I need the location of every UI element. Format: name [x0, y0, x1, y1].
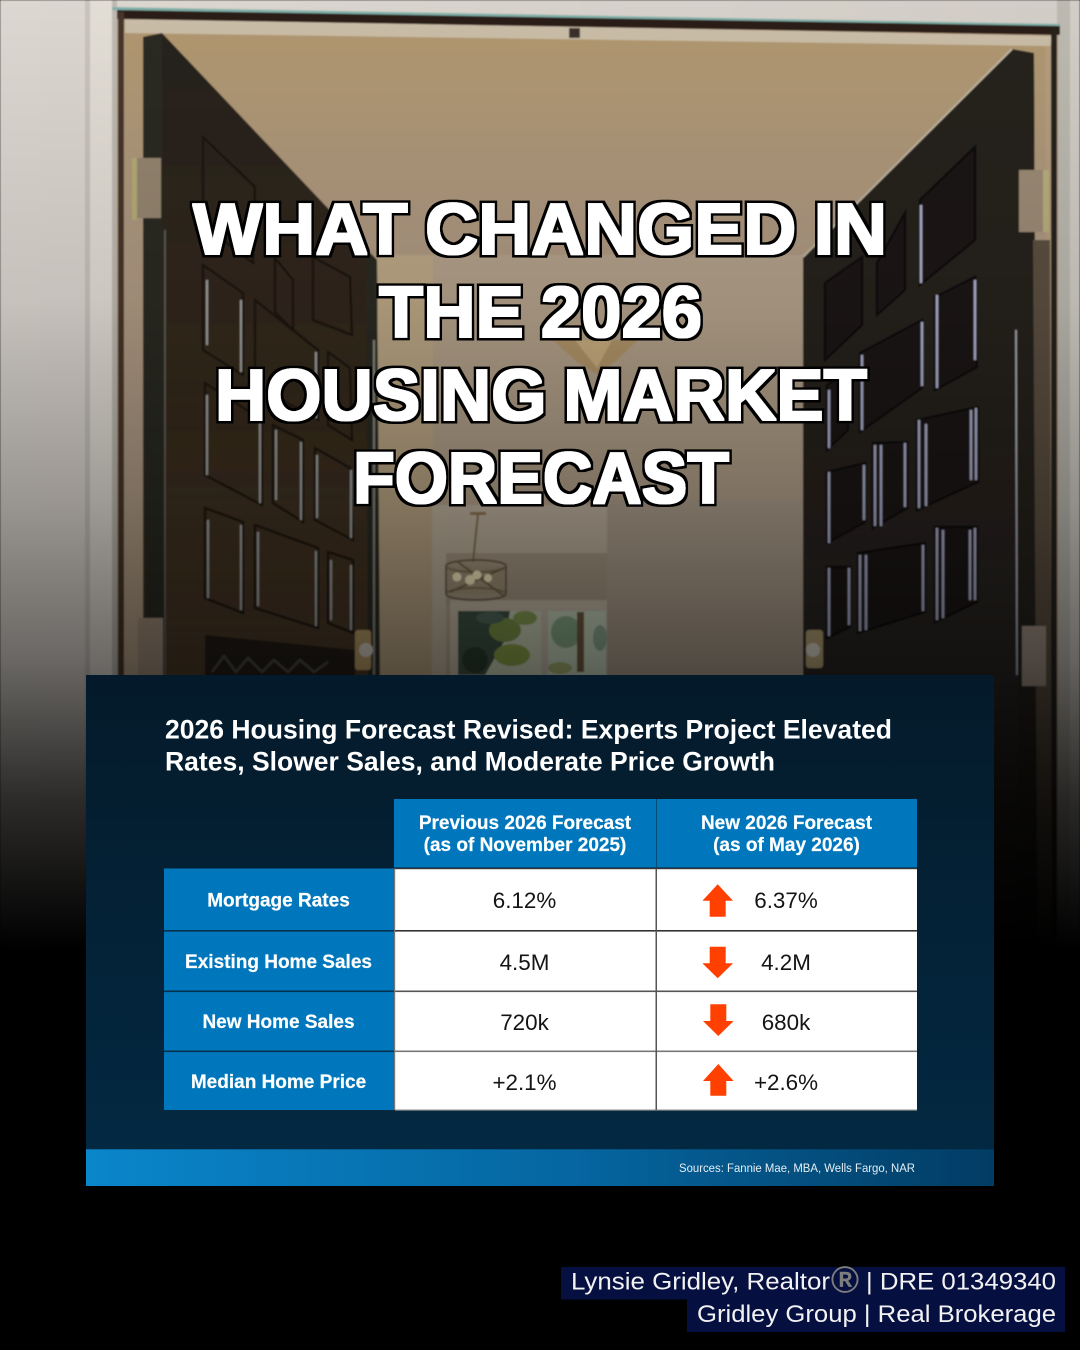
previous forecast values: 4.5M — [500, 950, 549, 975]
table values grid — [394, 868, 917, 1111]
agent contact block: | DRE 01349340 — [866, 1268, 1056, 1296]
new forecast values: 680k — [762, 1010, 811, 1035]
icon: up arrow mortgage rates — [702, 884, 733, 917]
table row labels: Median Home Price — [191, 1072, 366, 1093]
ceiling pendant light — [553, 340, 638, 374]
table row labels — [164, 868, 394, 1110]
new forecast values: 4.2M — [761, 950, 811, 975]
hallway window with foliage — [450, 603, 607, 675]
new forecast values: +2.6% — [754, 1070, 818, 1095]
table row labels: Mortgage Rates — [207, 890, 350, 912]
sources bar — [86, 1149, 994, 1186]
table header: previous forecast: Previous 2026 Forecast — [419, 813, 632, 834]
panel: forecast table slide — [86, 675, 994, 1186]
table header: new forecast — [656, 799, 917, 868]
table header: previous forecast — [394, 799, 656, 868]
table header: new forecast: (as of May 2026) — [713, 835, 860, 856]
new forecast values — [754, 888, 818, 1095]
previous forecast values — [492, 888, 557, 1095]
previous forecast values: 6.12% — [493, 888, 556, 913]
title: WHAT CHANGED IN — [193, 190, 887, 270]
title: HOUSING MARKET — [215, 356, 867, 436]
corridor walls and hall — [377, 255, 805, 685]
table header: new forecast: New 2026 Forecast — [701, 813, 873, 834]
previous forecast values: 720k — [500, 1010, 550, 1035]
left door — [143, 33, 380, 1000]
panel heading: 2026 Housing Forecast Revised: Experts Project Elevated — [165, 714, 892, 744]
table row labels: New Home Sales — [202, 1012, 355, 1033]
icon: up arrow median home price — [703, 1064, 734, 1096]
agent contact block — [561, 1265, 1065, 1332]
agent contact block: Ⓡ — [831, 1265, 859, 1297]
right door — [803, 49, 1052, 1000]
new forecast values: 6.37% — [754, 888, 818, 913]
icon: down arrow existing home sales — [702, 947, 733, 978]
title: THE 2026 — [379, 273, 702, 353]
background photo: open double doors — [0, 0, 1080, 1002]
agent contact block: Lynsie Gridley, Realtor — [571, 1268, 830, 1296]
door hinges and knobs — [132, 158, 1049, 686]
title: FORECAST — [353, 439, 729, 519]
sources bar: Sources: Fannie Mae, MBA, Wells Fargo, NAR — [679, 1161, 915, 1175]
icon: down arrow new home sales — [703, 1004, 734, 1036]
dark fade over photo — [0, 0, 1080, 1000]
table header: previous forecast: (as of November 2025) — [424, 835, 626, 856]
title — [193, 190, 887, 519]
hallway chandelier — [446, 512, 506, 600]
table row labels: Existing Home Sales — [185, 952, 372, 973]
agent contact block: Gridley Group | Real Brokerage — [697, 1301, 1056, 1328]
panel heading — [165, 714, 892, 776]
panel heading: Rates, Slower Sales, and Moderate Price Growth — [165, 746, 775, 776]
previous forecast values: +2.1% — [492, 1070, 557, 1095]
